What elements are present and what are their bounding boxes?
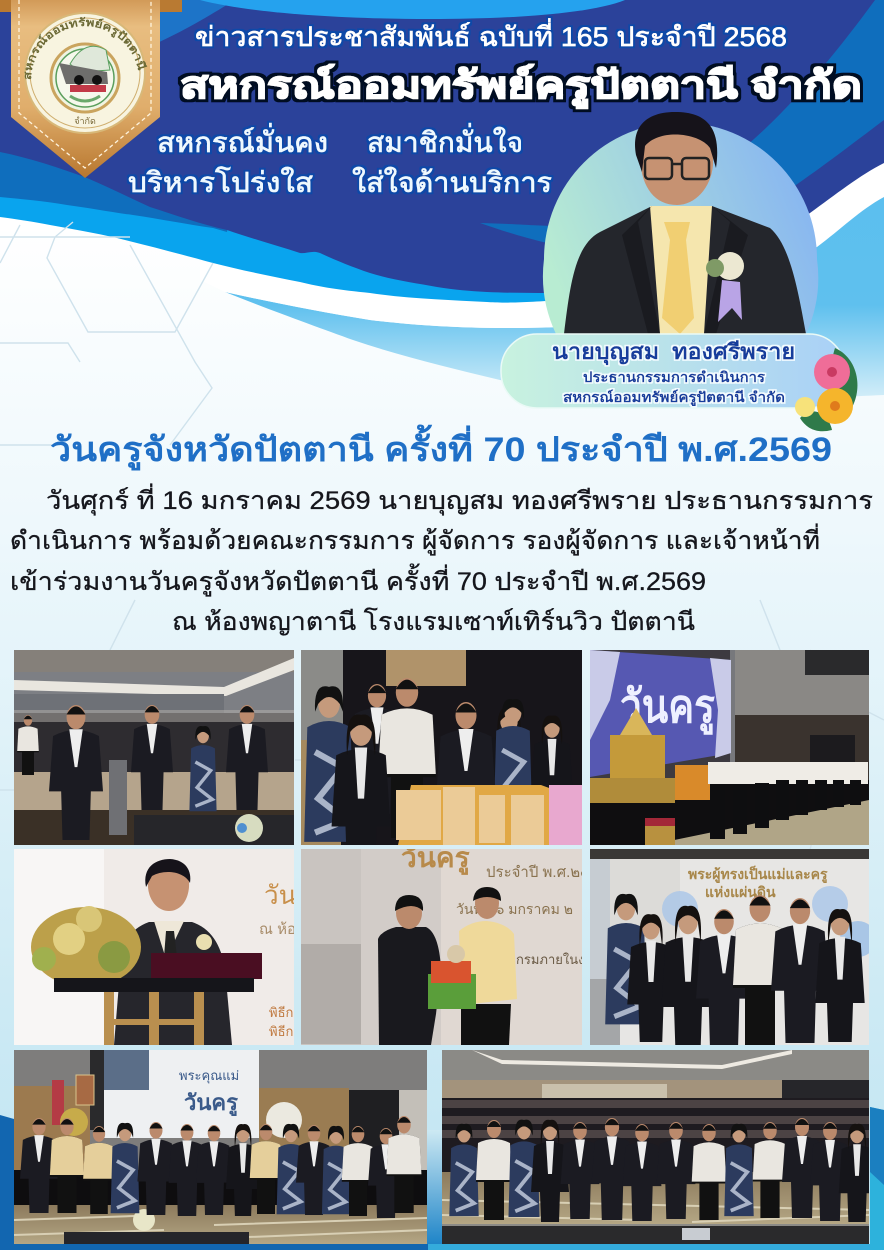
body paragraph: วันศุกร์ ที่ 16 มกราคม 2569 นายบุญสม ทองศรีพราย ประธานกรรมการ	[46, 483, 873, 516]
photo: gift presentation: วันที่ ๑๖ มกราคม ๒	[456, 900, 573, 917]
header wave background	[0, 0, 884, 399]
slogans: สหกรณ์มั่นคง	[157, 123, 328, 158]
slogans	[128, 123, 552, 198]
main heading: วันครูจังหวัดปัตตานี ครั้งที่ 70 ประจำปี พ.ศ.2569	[50, 424, 832, 471]
name plate	[501, 334, 857, 431]
name plate: นายบุญสม ทองศรีพราย	[552, 339, 795, 366]
photo: wide group on stage: วันครู	[184, 1090, 238, 1117]
photo: committee group	[590, 849, 869, 1045]
photo: assembly standing	[14, 650, 294, 845]
photo: chairman at podium: พิธีก	[269, 1005, 293, 1020]
slogans: สมาชิกมั่นใจ	[367, 123, 523, 158]
newsletter issue line: ข่าวสารประชาสัมพันธ์ ฉบับที่ 165 ประจำปี 2568	[195, 18, 787, 52]
photo: full audience group	[442, 1050, 869, 1244]
photo: wide group on stage: พระคุณแม่	[179, 1068, 239, 1084]
name plate: ประธานกรรมการดำเนินการ	[583, 369, 766, 385]
photo: stage screen and monks	[590, 650, 869, 845]
photo: gift presentation: วันครู	[401, 842, 470, 875]
photo: gift presentation: กรมภายในงาน	[516, 952, 601, 967]
seal	[24, 12, 148, 134]
photo: wide group on stage	[14, 1050, 427, 1244]
photo: gift presentation	[301, 842, 612, 1045]
icon: tropical flowers	[795, 348, 857, 431]
photo: stage screen and monks: วันครู	[620, 680, 715, 735]
portrait of chairman	[543, 112, 818, 334]
photo: gift presentation: ประจำปี พ.ศ.๒๕๖๙	[486, 864, 612, 881]
seal: สหกรณ์ออมทรัพย์ครูปัตตานี	[24, 16, 148, 80]
body paragraph: ดำเนินการ พร้อมด้วยคณะกรรมการ ผู้จัดการ รองผู้จัดการ และเจ้าหน้าที่	[10, 523, 820, 556]
body paragraph	[10, 483, 873, 636]
slogans: บริหารโปร่งใส	[128, 166, 313, 198]
photo: chairman at podium: พิธีก	[269, 1024, 293, 1039]
seal: จำกัด	[74, 116, 96, 126]
body paragraph: ณ ห้องพญาตานี โรงแรมเซาท์เทิร์นวิว ปัตตานี	[172, 607, 695, 636]
photo: committee group: พระผู้ทรงเป็นแม่และครู	[688, 865, 828, 883]
badge: gold ribbon with seal	[0, 0, 182, 178]
title: สหกรณ์ออมทรัพย์ครูปัตตานี จำกัด	[180, 64, 862, 109]
name plate: สหกรณ์ออมทรัพย์ครูปัตตานี จำกัด	[563, 389, 785, 406]
photo: group with products	[301, 650, 582, 845]
photo: committee group: แห่งแผ่นดิน	[705, 884, 776, 900]
photo: chairman at podium	[14, 849, 314, 1045]
slogans: ใส่ใจด้านบริการ	[352, 166, 552, 198]
photo: chairman at podium: ณ ห้อง	[259, 921, 303, 938]
photo: chairman at podium: วันค	[264, 880, 314, 910]
body paragraph: เข้าร่วมงานวันครูจังหวัดปัตตานี ครั้งที่ 70 ประจำปี พ.ศ.2569	[10, 563, 706, 597]
bottom wave edges	[0, 1107, 884, 1250]
